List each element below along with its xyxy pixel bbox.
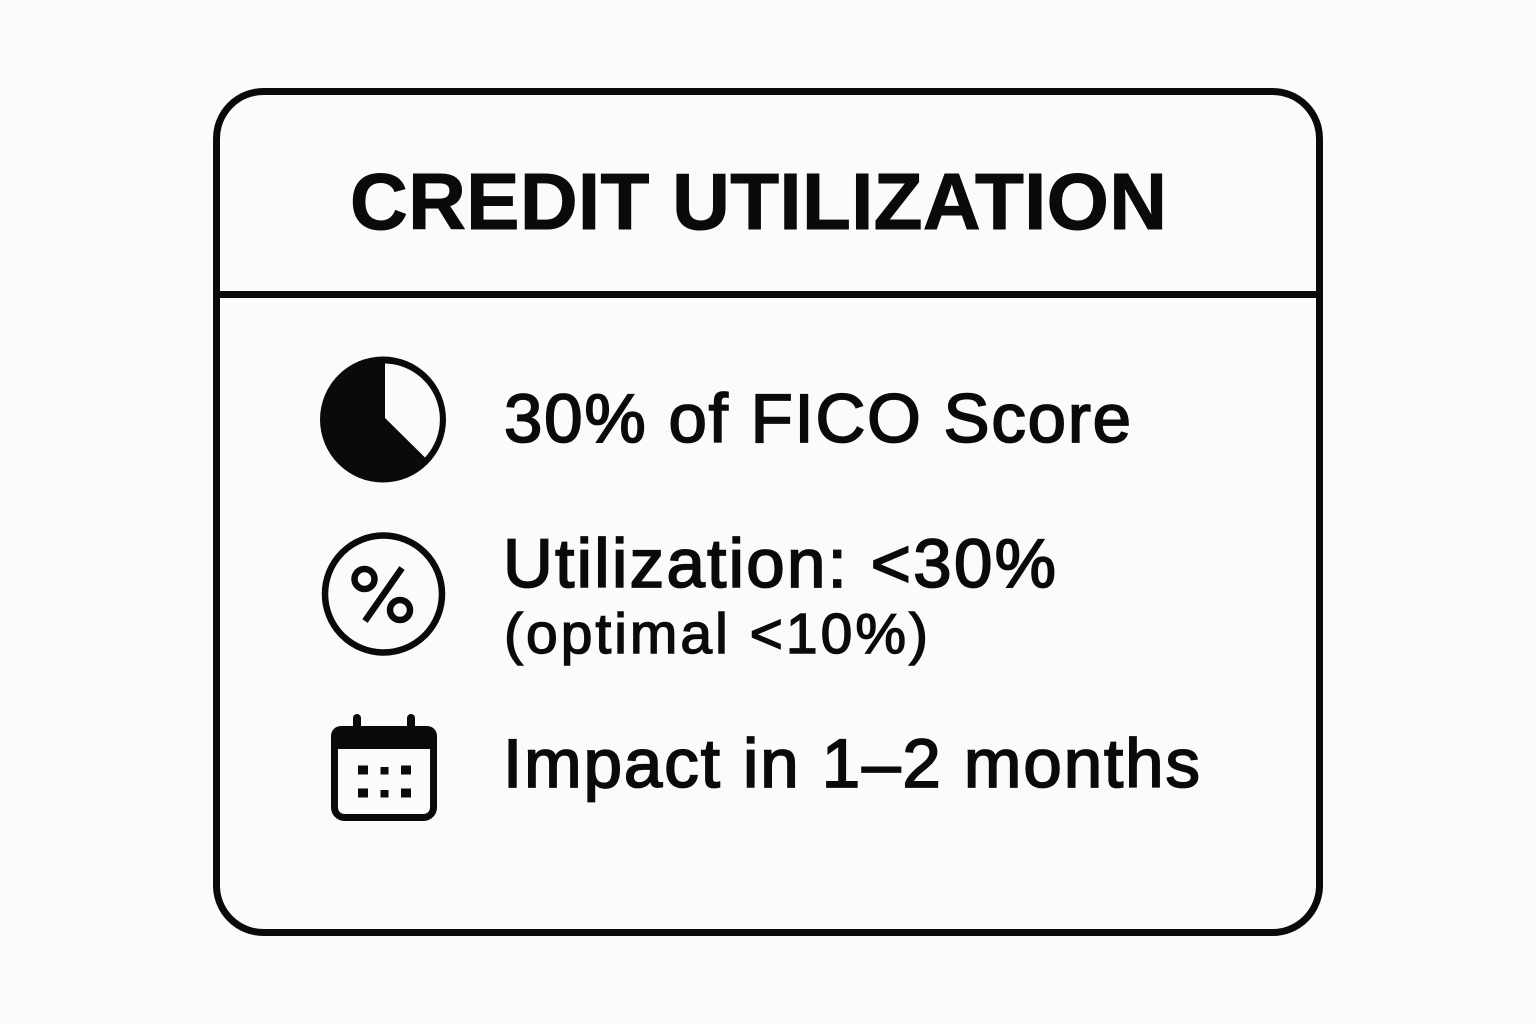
icon: calendar [331, 718, 437, 818]
icon: pie chart [320, 356, 446, 482]
panel: card frame [216, 92, 1320, 932]
text: utilization target: Utilization: <30% [503, 525, 1056, 602]
text: utilization target [503, 525, 1056, 666]
text: FICO score share: 30% of FICO Score [504, 380, 1131, 457]
heading: credit utilization: CREDIT UTILIZATION [350, 157, 1167, 246]
text: impact timing: Impact in 1–2 months [503, 725, 1200, 802]
icon: percent circle [325, 536, 442, 652]
text: optimal utilization: (optimal <10%) [504, 602, 928, 666]
